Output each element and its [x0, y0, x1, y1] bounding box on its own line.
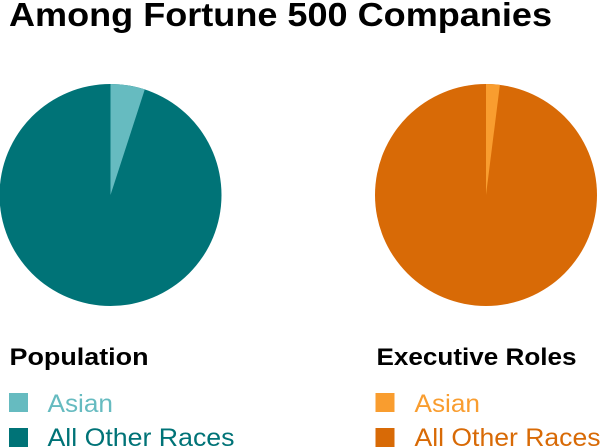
heading: executive roles: Executive Roles [376, 344, 576, 371]
legend: population asian: Asian [48, 390, 113, 418]
pie chart: population [0, 84, 222, 306]
legend: executive asian [376, 390, 480, 418]
legend: population asian [9, 390, 113, 418]
pie chart: executive roles [375, 84, 597, 306]
heading: population: Population [10, 344, 148, 371]
legend: executive asian: Asian [414, 390, 480, 418]
